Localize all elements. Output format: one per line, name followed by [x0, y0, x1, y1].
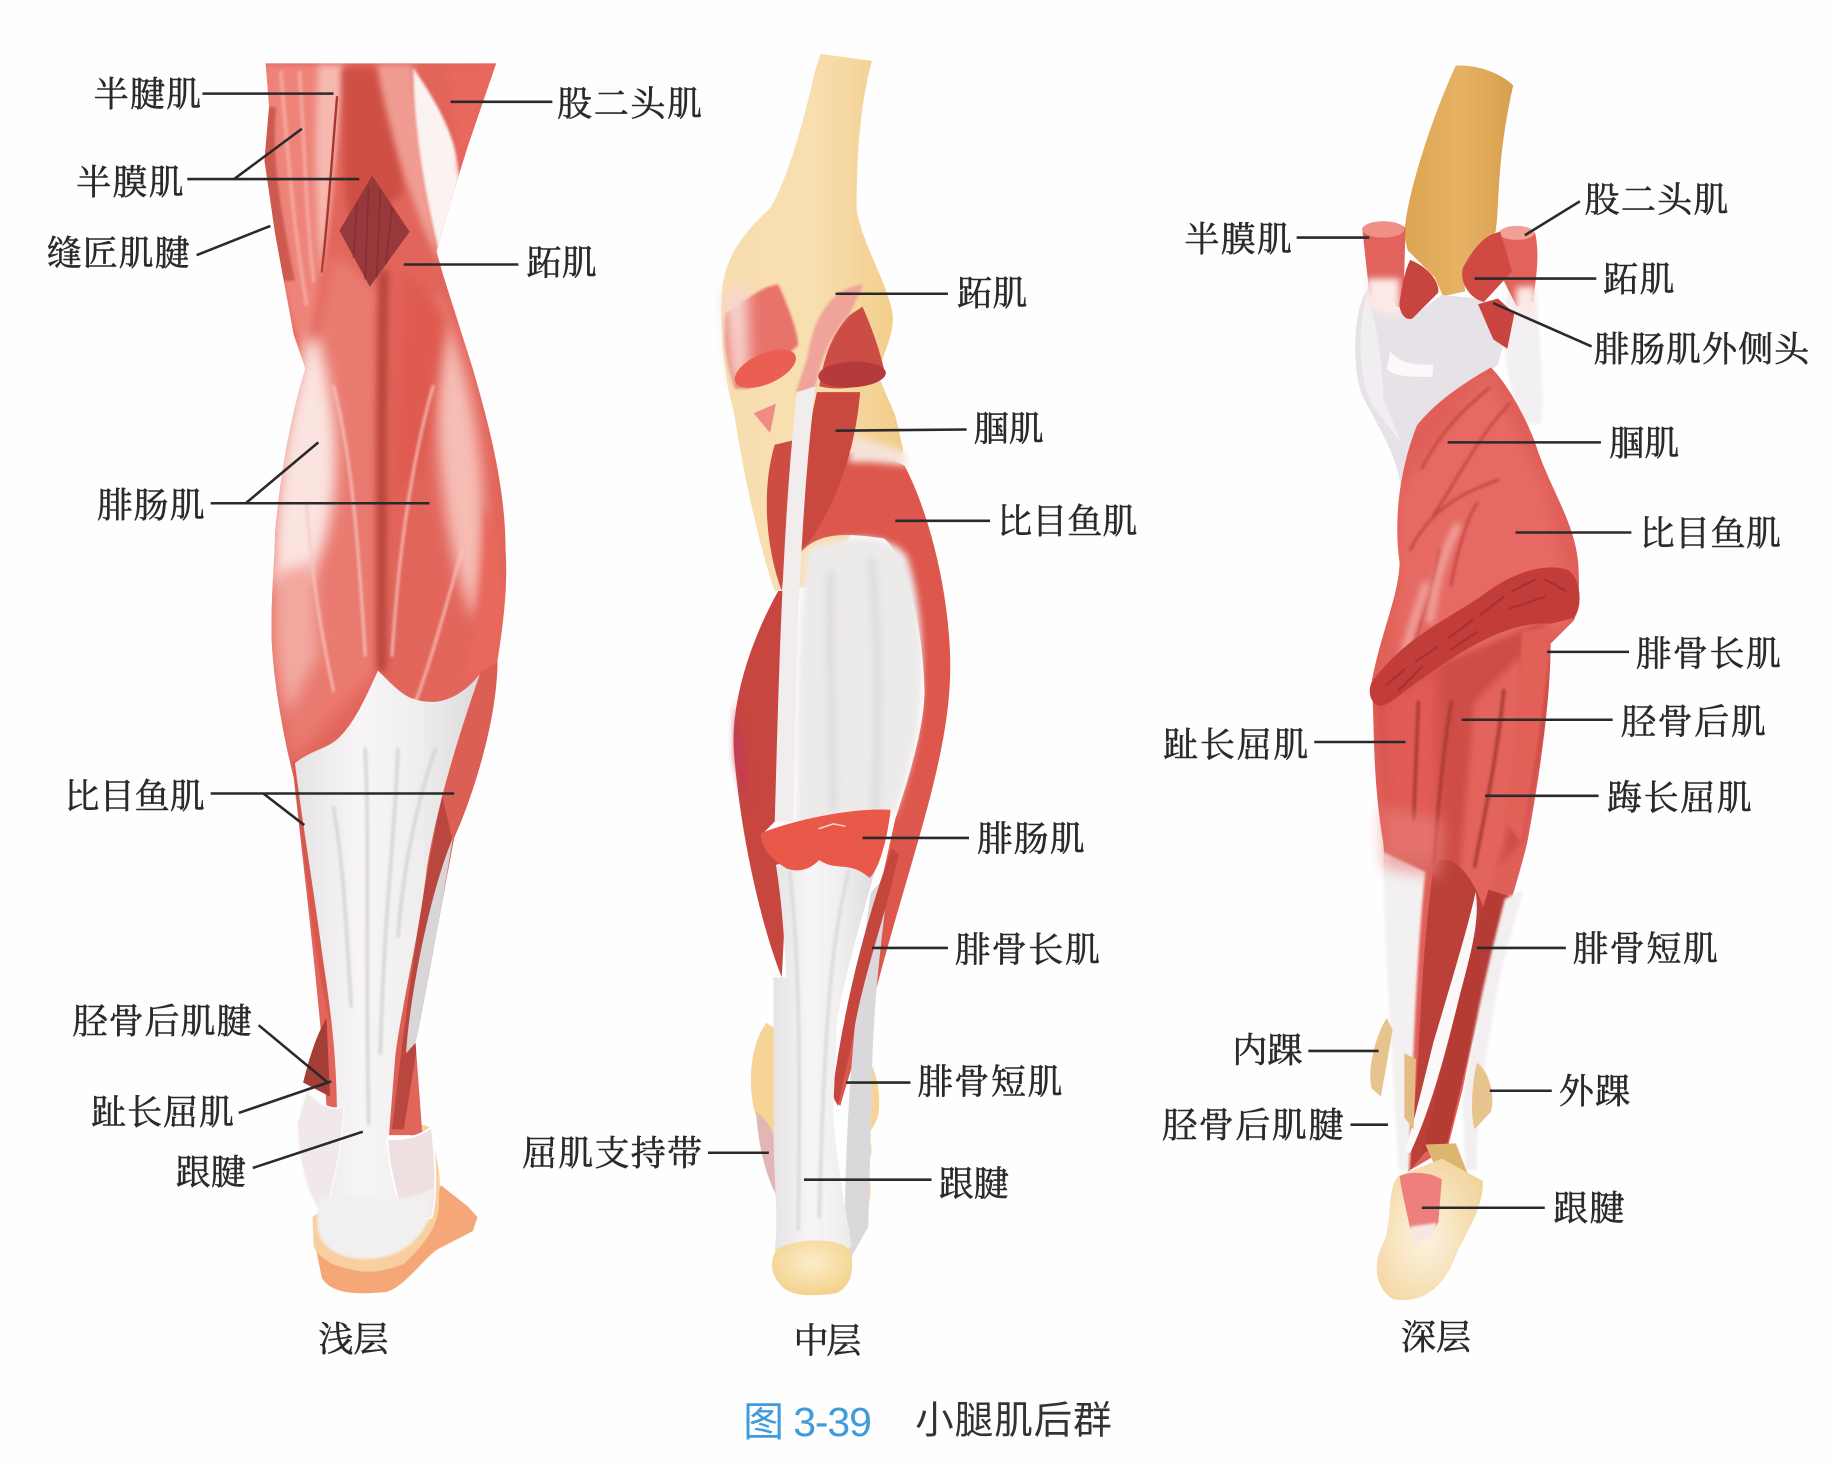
label: 趾长屈肌 — [91, 1081, 331, 1133]
caption: figure number: 图 3-39 — [743, 1399, 872, 1445]
label: 跖肌: 跖肌 — [527, 244, 597, 283]
femur and tibia bone — [721, 54, 903, 591]
label: 跖肌: 跖肌 — [1603, 260, 1675, 299]
label: 趾长屈肌: 趾长屈肌 — [91, 1094, 234, 1133]
right retinaculum — [387, 1127, 435, 1229]
lower tendons medial — [1381, 808, 1442, 1170]
label: 缝匠肌腱 — [47, 226, 270, 274]
leg illustration: middle — [721, 54, 950, 1295]
semimembranosus stump — [1362, 221, 1406, 318]
heading: 浅层: 浅层 — [318, 1321, 389, 1360]
label: 跖肌: 跖肌 — [957, 274, 1028, 313]
label: 腓骨短肌: 腓骨短肌 — [1573, 930, 1718, 969]
label: 腓肠肌: 腓肠肌 — [97, 486, 205, 525]
retinaculum — [756, 1112, 782, 1204]
popliteal fossa — [339, 176, 410, 287]
label: 缝匠肌腱: 缝匠肌腱 — [47, 235, 190, 274]
label: 跟腱 — [176, 1132, 363, 1192]
left retinaculum — [297, 1092, 344, 1217]
right white tendon — [1504, 293, 1542, 424]
gastrocnemius cut — [761, 810, 891, 878]
right lower tendon — [1463, 889, 1524, 1170]
label: 腘肌: 腘肌 — [974, 410, 1044, 449]
label: 胫骨后肌腱 — [73, 1002, 328, 1083]
heel fat pad — [315, 1186, 477, 1293]
label: 比目鱼肌 — [64, 778, 454, 825]
label: 半膜肌: 半膜肌 — [1184, 221, 1292, 260]
leg illustration: superficial — [257, 59, 515, 1293]
label: 腓肠肌外侧头 — [1493, 303, 1810, 370]
label: 外踝: 外踝 — [1559, 1073, 1630, 1112]
medial gastrocnemius stump — [723, 281, 801, 433]
leg illustration: deep — [1355, 65, 1592, 1300]
label: 胫骨后肌腱: 胫骨后肌腱 — [73, 1002, 252, 1041]
biceps femoris stump — [1498, 226, 1537, 322]
label: 腓肠肌 — [97, 442, 429, 525]
malleoli bones — [751, 1023, 879, 1217]
malleoli — [1370, 1018, 1492, 1129]
deep muscle mass — [1372, 368, 1579, 1172]
soleus muscle — [800, 452, 950, 1106]
red peroneal strip — [832, 848, 899, 1106]
label: 股二头肌: 股二头肌 — [1585, 181, 1729, 220]
label: 半膜肌 — [76, 129, 359, 202]
left strip beside popliteus — [767, 439, 799, 591]
soleus top fade — [848, 435, 908, 466]
label: 跟腱: 跟腱 — [176, 1153, 246, 1192]
lower tendon — [773, 859, 878, 1250]
label: 比目鱼肌: 比目鱼肌 — [64, 778, 205, 817]
achilles tendon — [295, 671, 480, 1256]
label: 屈肌支持带: 屈肌支持带 — [522, 1135, 702, 1174]
cut soleus band — [1370, 567, 1580, 706]
label: 腓肠肌外侧头: 腓肠肌外侧头 — [1594, 331, 1810, 370]
label: 股二头肌: 股二头肌 — [557, 85, 702, 124]
label: 腓骨短肌: 腓骨短肌 — [917, 1063, 1063, 1102]
heel bone — [1377, 1159, 1483, 1300]
caption: figure title: 小腿肌后群 — [915, 1400, 1112, 1443]
talus — [1425, 1143, 1469, 1176]
label: 半腱肌: 半腱肌 — [94, 76, 201, 115]
label: 胫骨后肌腱: 胫骨后肌腱 — [1162, 1107, 1343, 1146]
panel: superficial layer — [47, 59, 702, 1360]
heading: 中层: 中层 — [793, 1322, 862, 1361]
grey peroneal tendons — [845, 872, 889, 1258]
femur — [1405, 65, 1513, 296]
label: 比目鱼肌: 比目鱼肌 — [997, 503, 1138, 542]
calcaneus — [772, 1241, 852, 1295]
heel skin strip — [312, 1125, 440, 1272]
soleus left belly — [734, 591, 788, 977]
label: 比目鱼肌: 比目鱼肌 — [1640, 514, 1781, 553]
white central tendon — [1404, 892, 1477, 1153]
label: 腓肠肌: 腓肠肌 — [977, 820, 1085, 859]
popliteus — [800, 392, 860, 550]
label: 趾长屈肌: 趾长屈肌 — [1163, 726, 1308, 765]
plantaris lateral cut — [1462, 232, 1512, 302]
calcaneus white cap — [317, 1188, 433, 1259]
white aponeurosis — [796, 538, 922, 825]
label: 跟腱: 跟腱 — [939, 1165, 1009, 1204]
gastrocnemius medial and lateral heads — [267, 252, 380, 761]
muscle mass — [257, 59, 515, 1147]
label: 腓骨长肌: 腓骨长肌 — [955, 931, 1100, 970]
label: 内踝: 内踝 — [1232, 1032, 1303, 1071]
plantaris medial cut — [1400, 260, 1438, 319]
knee capsule white — [1355, 287, 1512, 489]
panel: middle layer — [522, 54, 1138, 1361]
label: 半膜肌: 半膜肌 — [76, 163, 184, 202]
gastrocnemius lateral head — [1478, 298, 1514, 349]
label: 跟腱: 跟腱 — [1553, 1190, 1624, 1229]
lateral head dark stump — [817, 307, 887, 389]
heading: 深层: 深层 — [1401, 1318, 1472, 1357]
achilles stump pink — [1400, 1173, 1442, 1243]
dark triangle muscle — [303, 1018, 330, 1097]
label: 腘肌: 腘肌 — [1609, 424, 1679, 463]
label: 踇长屈肌: 踇长屈肌 — [1607, 779, 1752, 818]
label: 股二头肌 — [1525, 181, 1729, 235]
label: 腓骨长肌: 腓骨长肌 — [1636, 635, 1781, 674]
plantaris tendon — [775, 284, 864, 822]
panel: deep layer — [1162, 65, 1810, 1357]
label: 胫骨后肌: 胫骨后肌 — [1621, 703, 1766, 742]
